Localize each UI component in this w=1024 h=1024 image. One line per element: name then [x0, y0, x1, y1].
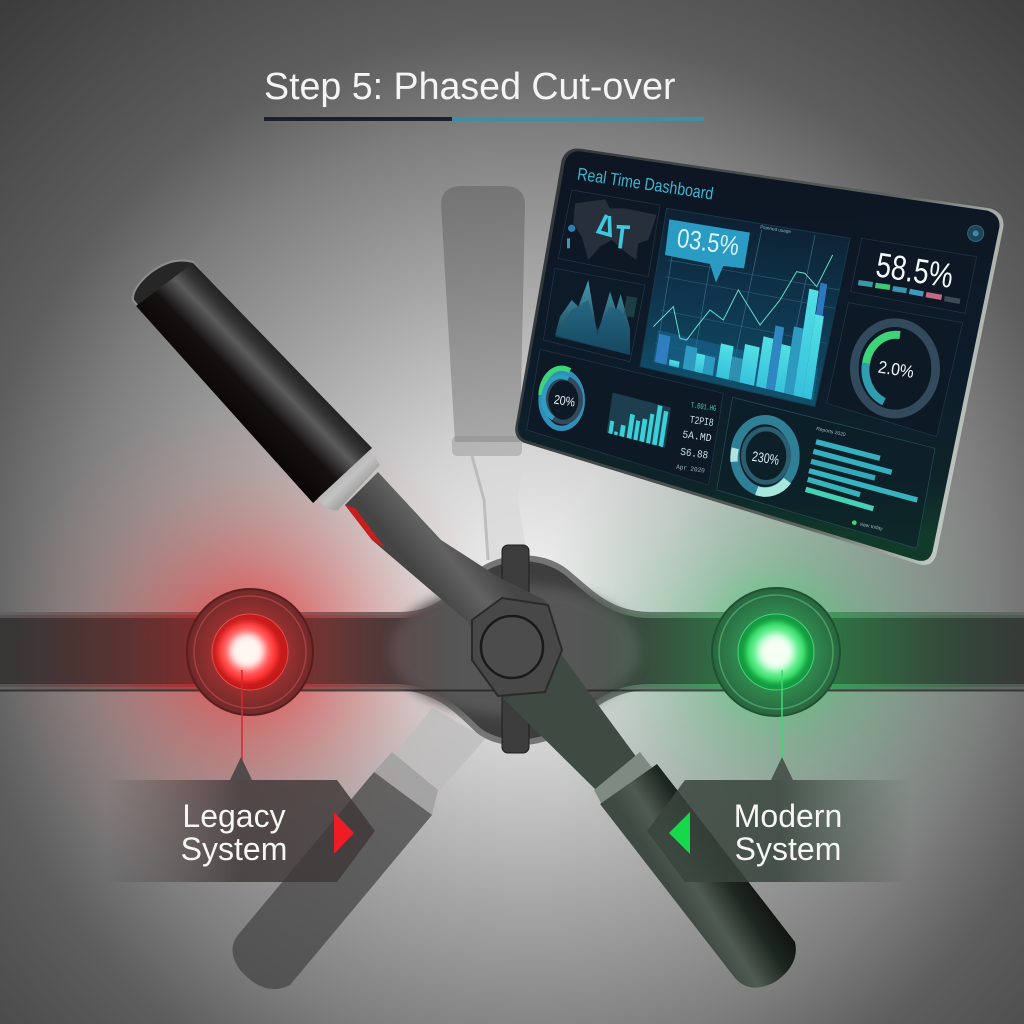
- legacy leader line: [241, 670, 243, 760]
- callout: legacy system: [105, 757, 375, 882]
- main lever: [133, 260, 796, 988]
- lever shaft: lower: [505, 655, 640, 790]
- horizontal bars: [806, 442, 917, 509]
- panel: lower-right: [717, 397, 935, 548]
- tablet frame: [515, 149, 1003, 565]
- upper collar: [318, 450, 380, 510]
- title underline: [264, 117, 704, 121]
- modern label: Modern: [734, 798, 842, 834]
- panel: lower-left: [527, 349, 723, 485]
- legacy label: Legacy: [182, 798, 286, 834]
- callout value: 03.5%: [675, 223, 741, 261]
- icon: green arrow: [669, 812, 690, 854]
- table values: [676, 401, 717, 475]
- bars legend: view today: [859, 521, 884, 532]
- tablet dashboard: [515, 149, 1003, 565]
- chart line: [653, 255, 833, 340]
- table values: T.001.HG: [690, 401, 717, 414]
- donut value: 2.0%: [877, 357, 915, 382]
- small donut: [541, 368, 582, 428]
- legacy label: System: [181, 831, 287, 867]
- vertical clamp: [502, 545, 529, 753]
- green status light: [712, 588, 840, 716]
- ghost lever: upper position: [441, 186, 528, 560]
- red reflection on shaft: [345, 505, 385, 548]
- small bar chart: [607, 393, 671, 448]
- hub nut: [472, 598, 562, 696]
- bars caption: Reports 2020: [816, 426, 846, 438]
- ghost lever: lower position: [232, 708, 486, 989]
- red status light: [187, 589, 313, 715]
- medium donut: 230%: [751, 448, 780, 468]
- panel: world map: [558, 190, 660, 277]
- bars legend: [852, 520, 884, 532]
- red glow: [0, 400, 500, 900]
- screen: [518, 151, 999, 561]
- small donut: 20%: [553, 392, 576, 410]
- upper grip: [136, 263, 372, 503]
- modern label: System: [735, 831, 841, 867]
- table values: T2PI8: [689, 415, 714, 430]
- green glow: [526, 400, 1024, 900]
- callout: chart value: [665, 219, 750, 283]
- dashboard title: Real Time Dashboard: [576, 164, 715, 204]
- icon: red arrow: [334, 812, 354, 854]
- upper grip cap: [133, 260, 200, 315]
- panel: area chart: [543, 268, 645, 362]
- table values: Apr 2020: [676, 463, 705, 475]
- panel: large donut: [827, 303, 963, 437]
- panel: main chart: [640, 208, 850, 407]
- metric value: 58.5%: [873, 246, 956, 296]
- chart bars: [653, 247, 831, 400]
- callout: modern system: [647, 757, 910, 882]
- settings icon: [968, 225, 984, 241]
- panel: large metric: [851, 238, 977, 313]
- modern leader line: [781, 670, 783, 760]
- horizontal rail with central flare: [0, 558, 1024, 743]
- medium donut: [734, 420, 795, 492]
- legend: Planned usage: [760, 224, 792, 234]
- metric segments: [858, 283, 960, 301]
- lever shaft: upper: [345, 472, 562, 700]
- title: Step 5: Phased Cut-over: [264, 65, 676, 107]
- lower collar: [594, 752, 660, 812]
- table values: S6.88: [679, 447, 709, 463]
- table values: 5A.MD: [681, 429, 712, 445]
- lower grip: [600, 764, 796, 988]
